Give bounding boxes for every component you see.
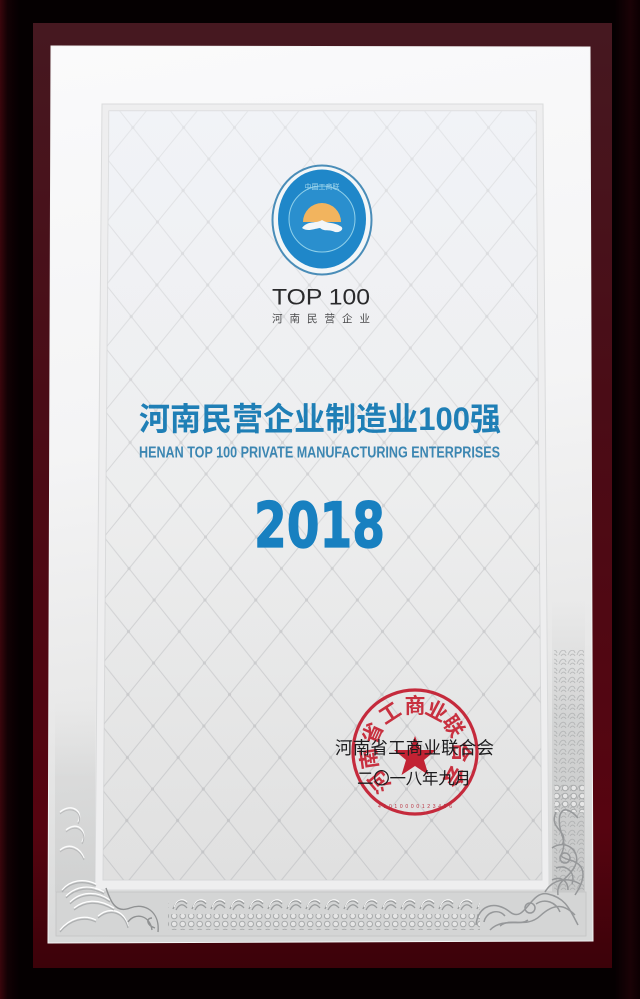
seal arc text: 省 xyxy=(359,719,388,748)
seal arc text: 业 xyxy=(422,697,451,727)
seal arc text xyxy=(357,695,472,797)
year 2018: 2018 xyxy=(254,489,385,562)
silver floral border xyxy=(55,600,586,936)
corner scroll: bottom left xyxy=(60,881,158,932)
issue date: 二〇一八年九月 xyxy=(357,769,471,788)
logo subtitle: 河南民营企业 xyxy=(272,312,370,325)
seal arc text: 商 xyxy=(404,695,426,718)
inner panel with diamond lattice xyxy=(95,104,549,890)
emblem outer ring xyxy=(272,166,372,274)
seal star xyxy=(394,736,436,775)
seal ring xyxy=(353,690,477,814)
right ornament band xyxy=(552,600,585,892)
seal arc text: 河 xyxy=(365,766,396,797)
emblem inner ring xyxy=(289,186,355,252)
emblem blue disc xyxy=(278,170,366,268)
title english: HENAN TOP 100 PRIVATE MANUFACTURING ENTERPRISES xyxy=(139,444,500,462)
left ornament band xyxy=(55,700,95,892)
logo: Top 100 emblem xyxy=(272,166,372,274)
silver paper sheet xyxy=(48,46,593,943)
icon: white cloud and wave xyxy=(302,220,342,232)
seal arc text: 联 xyxy=(437,711,468,742)
issuer name: 河南省工商业联合会 xyxy=(335,738,494,758)
corner scroll: bottom right xyxy=(476,810,583,930)
logo wordmark TOP 100: TOP 100 xyxy=(272,284,370,310)
seal code number: 41010000123456 xyxy=(378,804,452,810)
seal arc text: 工 xyxy=(375,698,405,729)
red official seal xyxy=(353,690,477,814)
icon: rising sun xyxy=(303,203,341,222)
bottom ornament band xyxy=(56,892,586,936)
ring text: 中国工商联 xyxy=(304,182,340,191)
seal arc text: 合 xyxy=(449,742,472,762)
seal arc text: 会 xyxy=(438,761,469,791)
seal arc text: 南 xyxy=(357,746,383,770)
title chinese: 河南民营企业制造业100强 xyxy=(139,401,501,437)
